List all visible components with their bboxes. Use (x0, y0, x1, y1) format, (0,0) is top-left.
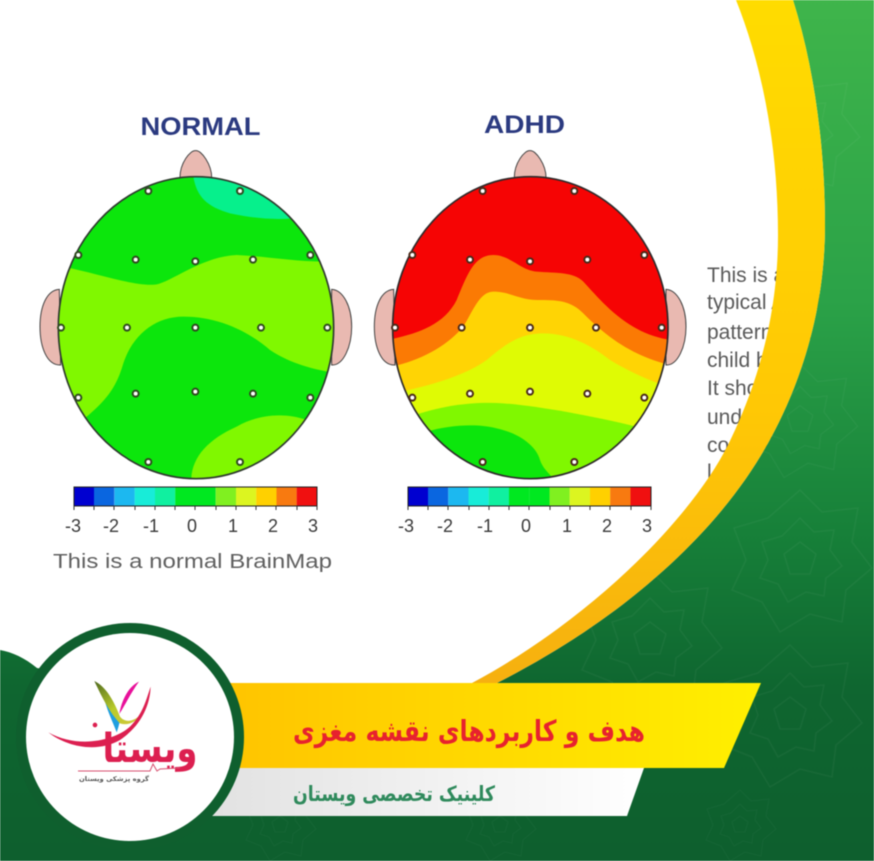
right ear (666, 289, 686, 365)
side note text, cut off by the arc: cortical (707, 434, 774, 457)
pulse line (78, 764, 180, 771)
subtitle text: کلینیک تخصصی ویستان (293, 782, 496, 806)
colour scale: ADHD: 2 (602, 516, 612, 536)
curved yellow band (472, 0, 825, 683)
side note text, cut off by the arc (707, 264, 831, 484)
side note text, cut off by the arc: pattern in a (707, 321, 812, 344)
side note text, cut off by the arc: under (707, 406, 761, 429)
colour scale: ADHD: 1 (562, 516, 572, 536)
side note text, cut off by the arc: This is a (707, 264, 786, 287)
colour scale: normal: -3 (65, 516, 81, 536)
side note text, cut off by the arc: l (707, 461, 712, 484)
colour scale: ADHD: 0 (521, 516, 531, 536)
caption: normal BrainMap: This is a normal BrainMap (53, 550, 332, 573)
colour scale: normal: -2 (103, 516, 119, 536)
left ear (374, 289, 395, 365)
heading: NORMAL: NORMAL (140, 113, 260, 141)
side note text, cut off by the arc: child brain. (707, 349, 809, 372)
colour scale: ADHD: -2 (437, 516, 453, 536)
side note text, cut off by the arc: It shows (707, 377, 784, 400)
colour scale: normal: 3 (308, 516, 318, 536)
logo mark: Vistan (48, 681, 198, 783)
brain map: ADHD (374, 151, 686, 487)
colour scale: ADHD: -3 (398, 516, 414, 536)
colour scale: normal: -1 (143, 516, 159, 536)
background star pattern (246, 67, 872, 861)
title text: هدف و کاربردهای نقشه مغزی (293, 714, 645, 748)
colour scale: normal: 2 (268, 516, 278, 536)
contour regions (392, 176, 668, 479)
colour scale: ADHD: -1 (477, 516, 493, 536)
electrodes (58, 188, 330, 465)
heading: ADHD: ADHD (484, 111, 565, 139)
nose (180, 151, 212, 177)
electrodes (392, 188, 665, 465)
colour scale: ADHD (398, 487, 652, 536)
colour scale: normal: 1 (228, 516, 238, 536)
head outline (58, 177, 334, 479)
subtitle banner (212, 768, 644, 816)
head outline (393, 177, 668, 479)
colour scale: normal: 0 (187, 516, 197, 536)
contour regions (58, 176, 334, 479)
leaves and swash (48, 681, 151, 747)
logo tagline: گروه پزشکی ویستان (79, 775, 149, 783)
colour scale: ADHD: 3 (642, 516, 652, 536)
colour scale: normal (65, 487, 318, 536)
title banner (225, 683, 761, 768)
brain map: normal (40, 151, 352, 487)
nose (514, 151, 546, 177)
right ear (332, 289, 352, 365)
logo circle (16, 623, 244, 851)
left ear (40, 289, 61, 365)
logo wordmark: ویستا (102, 726, 198, 772)
side note text, cut off by the arc: typical ADHD (707, 291, 831, 314)
